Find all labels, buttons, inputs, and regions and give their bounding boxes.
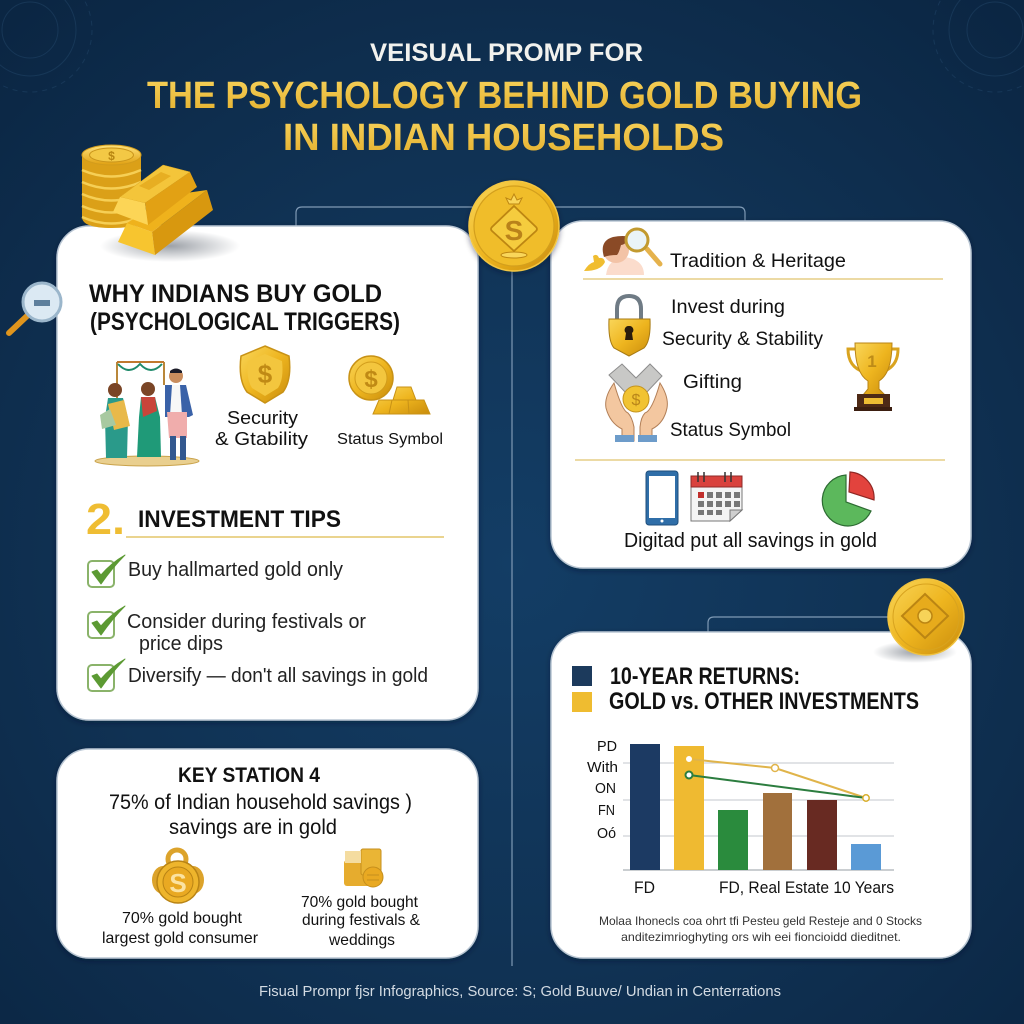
statistic: 75 percent of savings <box>109 791 412 839</box>
panel background <box>57 226 478 720</box>
icon: small gold coin <box>873 579 964 663</box>
x axis labels: FD <box>634 878 655 897</box>
statistic: 75 percent of savings: savings are in gold <box>169 816 337 839</box>
icon: gold shield <box>240 346 290 403</box>
icon: magnifying glass <box>9 283 61 333</box>
icon: hands holding coin: $ <box>632 392 641 409</box>
heading: why Indians buy gold: WHY INDIANS BUY GOLD <box>89 280 382 308</box>
label: gifting: Gifting <box>683 371 742 393</box>
icon: stack of coins and gold bars <box>82 145 240 262</box>
icon: trophy <box>848 343 898 411</box>
icon: child with magnifier <box>584 229 660 275</box>
chart caption <box>599 914 922 944</box>
icon: gold shield: $ <box>258 359 273 389</box>
legend swatches <box>572 666 592 712</box>
upper bar <box>120 165 190 203</box>
heading: why Indians buy gold: (PSYCHOLOGICAL TRIGGERS) <box>90 308 400 336</box>
footer source line: Fisual Prompr fjsr Infographics, Source: S; Gold Buuve/ Undian in Centerrations <box>259 984 781 1000</box>
title line 2: THE PSYCHOLOGY BEHIND GOLD BUYING <box>147 75 862 117</box>
panel: why Indians buy gold and investment tips <box>57 226 478 720</box>
heading: 10-year returns: GOLD vs. OTHER INVESTMENTS <box>609 688 919 715</box>
decorative corner mandala <box>0 0 1024 92</box>
icon: coin with jewellery <box>152 850 204 903</box>
icon: padlock <box>609 296 650 356</box>
icon: smartphone <box>646 471 678 525</box>
icon: calendar <box>691 472 742 521</box>
label: security and stability: & Gtability <box>215 429 308 449</box>
divider <box>583 278 943 280</box>
trend lines <box>686 756 869 801</box>
y axis labels <box>587 738 618 842</box>
lower bar <box>152 190 213 255</box>
panel background <box>551 221 971 568</box>
tip 1: Buy hallmarted gold only <box>128 559 343 581</box>
statistic: largest gold consumer: 70% gold bought <box>122 910 243 927</box>
statistic: festivals and weddings <box>301 894 420 949</box>
heading: investment tips: INVESTMENT TIPS <box>138 506 341 533</box>
heading: why Indians buy gold <box>89 280 400 336</box>
icon: large gold coin: S <box>505 215 523 246</box>
statistic: festivals and weddings: 70% gold bought <box>301 894 419 911</box>
tip 1 <box>88 555 343 587</box>
chart caption: anditezimrioghyting ors wih eei fioncioidd dieditnet. <box>621 930 901 944</box>
y axis labels: With <box>587 759 618 776</box>
heading: investment tips: 2. <box>86 495 125 544</box>
panel background <box>57 749 478 958</box>
tip 2: Consider during festivals or <box>127 611 366 633</box>
label: invest during: Invest during <box>671 296 785 318</box>
heading: 10-year returns <box>609 663 919 715</box>
icon: gold jewellery set <box>344 849 383 887</box>
icon: pie chart <box>822 472 874 526</box>
connector lines <box>296 207 900 966</box>
icon: stack of coins and gold bars: $ <box>108 149 115 163</box>
icon: hands holding coin <box>606 364 667 442</box>
icon: large gold coin <box>469 181 559 271</box>
statistic: 75 percent of savings: 75% of Indian household savings ) <box>109 791 412 814</box>
label: security and stability <box>215 408 308 449</box>
statistic: festivals and weddings: weddings <box>328 932 395 949</box>
x axis labels <box>634 878 894 897</box>
y axis labels: ON <box>595 780 616 797</box>
heading: investment tips <box>86 495 444 544</box>
chart caption: Molaa Ihonecls coa ohrt tfi Pesteu geld Resteje and 0 Stocks <box>599 914 922 928</box>
tip 2: price dips <box>139 633 223 655</box>
tip 2 <box>88 606 366 655</box>
label: status symbol: Status Symbol <box>337 431 443 448</box>
heading: key station 4: KEY STATION 4 <box>178 764 320 787</box>
bar chart <box>623 744 894 870</box>
tip 3: Diversify — don't all savings in gold <box>128 665 428 687</box>
tip 3 <box>88 659 428 691</box>
statistic: festivals and weddings: during festivals & <box>302 912 420 929</box>
label: tradition and heritage: Tradition & Heritage <box>670 250 846 272</box>
panel: 10-year returns chart <box>551 632 971 958</box>
icon: gold coin and bars: $ <box>364 366 378 393</box>
icon: gold coin and bars <box>349 356 430 414</box>
divider <box>575 459 945 461</box>
y axis labels: FN <box>598 802 615 819</box>
y axis labels: PD <box>597 738 617 755</box>
title <box>147 39 862 159</box>
heading: 10-year returns: 10-YEAR RETURNS: <box>610 663 800 690</box>
panel: key statistics <box>57 749 478 958</box>
title line 3: IN INDIAN HOUSEHOLDS <box>283 117 724 159</box>
title line 1: VEISUAL PROMP FOR <box>370 39 643 67</box>
y axis labels: Oó <box>597 825 616 842</box>
label: security and stability: Security & Stability <box>662 328 823 350</box>
icon: trophy: 1 <box>867 352 877 371</box>
label: security and stability: Security <box>227 408 298 428</box>
label: status symbol: Status Symbol <box>670 419 791 441</box>
statistic: largest gold consumer <box>102 910 259 947</box>
icon: family at wedding mandap <box>95 362 199 466</box>
statistic: largest gold consumer: largest gold consumer <box>102 930 259 947</box>
icon: coin with jewellery: S <box>169 868 187 898</box>
panel background <box>551 632 971 958</box>
x axis labels: FD, Real Estate 10 Years <box>719 878 894 897</box>
label: digital caption: Digitad put all savings in gold <box>624 530 877 552</box>
panel: tradition and behaviours <box>551 221 971 568</box>
